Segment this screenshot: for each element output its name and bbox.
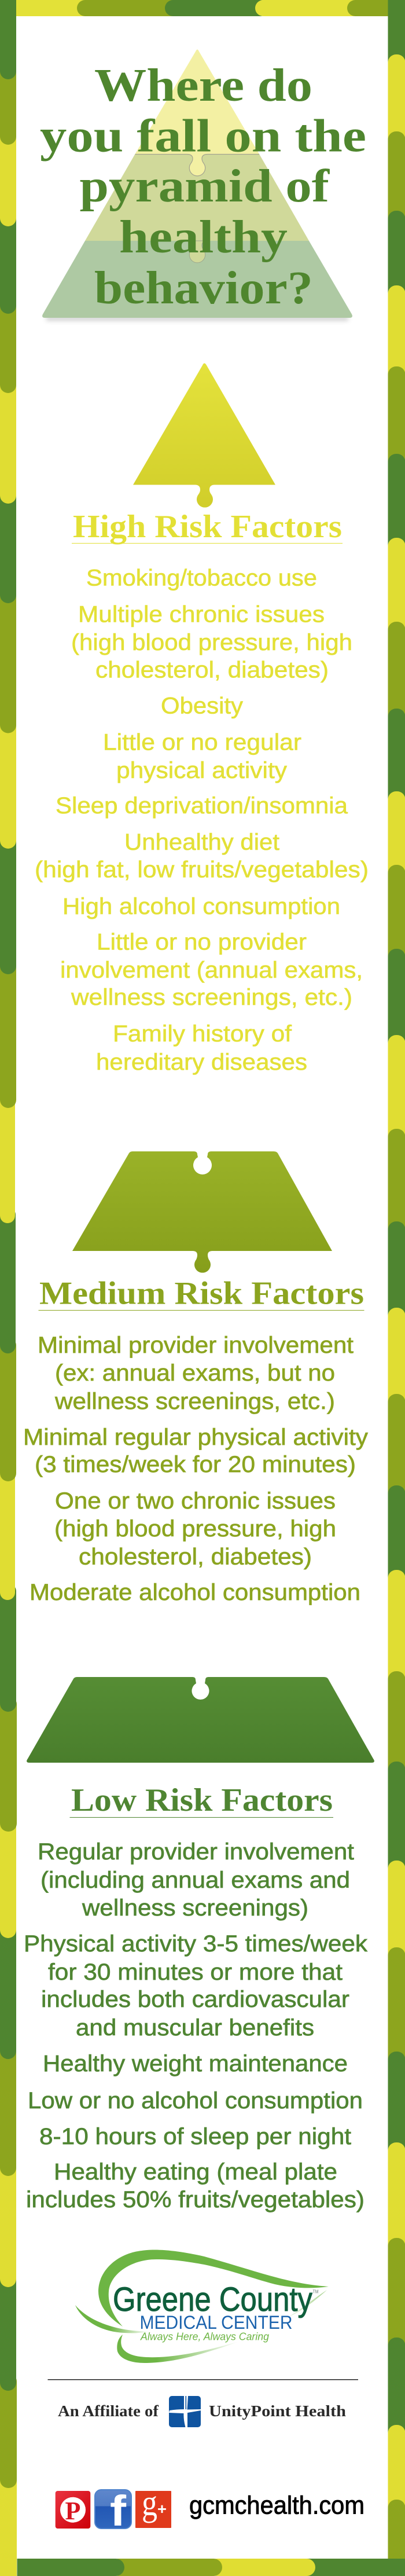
text block: high risk list: Family history of (113, 1021, 292, 1047)
text block: high risk list: cholesterol, diabetes) (95, 658, 329, 683)
text block: medium risk list: (ex: annual exams, but no (55, 1360, 335, 1386)
text block: high risk list: Sleep deprivation/insomnia (56, 793, 348, 819)
pyramid tier: middle (85, 154, 309, 241)
puzzle seam (135, 154, 259, 176)
left border stripe (0, 0, 17, 2576)
heading: high risk factors: High Risk Factors (73, 509, 342, 545)
affiliate line (58, 2396, 346, 2427)
text block: medium risk list: (high blood pressure, high (54, 1516, 336, 1542)
affiliate text: An Affiliate of (58, 2402, 159, 2420)
text block: medium risk list: One or two chronic issues (55, 1488, 336, 1514)
text block: high risk list: physical activity (116, 758, 287, 783)
icon: pinterest (56, 2491, 90, 2529)
text block: low risk list: for 30 minutes or more that (48, 1959, 343, 1985)
text block: medium risk list: (3 times/week for 20 minutes) (35, 1452, 356, 1477)
text block: medium risk list: wellness screenings, etc.) (54, 1389, 335, 1414)
top border stripe (16, 0, 399, 16)
text block: high risk list: hereditary diseases (96, 1050, 307, 1075)
logo swoosh: lower left (75, 2305, 149, 2333)
text block: low risk list: Healthy eating (meal plate (54, 2159, 337, 2185)
text block: high risk list: involvement (annual exams, (60, 957, 363, 983)
logo swoosh: bottom (117, 2335, 238, 2363)
heading: medium risk factors: Medium Risk Factors (39, 1276, 364, 1312)
text block: high risk list: Obesity (161, 693, 243, 719)
text block: low risk list: Physical activity 3-5 times/week (24, 1931, 368, 1957)
logo swoosh: top arc (98, 2250, 329, 2327)
icon: medium risk pyramid tier (72, 1151, 332, 1273)
title: pyramid of (80, 161, 330, 212)
title (40, 60, 366, 314)
text block: low risk list: (including annual exams and (41, 1867, 350, 1893)
text block: high risk list: Smoking/tobacco use (86, 566, 317, 591)
heading: low risk factors: Low Risk Factors (71, 1782, 333, 1818)
logo: Greene County Medical Center (75, 2250, 329, 2363)
affiliate name: UnityPoint Health (209, 2402, 346, 2420)
text block: low risk list (24, 1839, 368, 2212)
text block: high risk list: High alcohol consumption (62, 894, 340, 919)
text block: medium risk list (23, 1333, 368, 1605)
puzzle knob: middle to bottom (187, 241, 208, 263)
pyramid tier: bottom (42, 241, 352, 318)
title: you fall on the (40, 111, 366, 162)
text block: high risk list (35, 566, 369, 1075)
icon: UnityPoint cross (169, 2396, 201, 2427)
text block: low risk list: Low or no alcohol consumption (28, 2088, 363, 2113)
logo swoosh: right thin (288, 2290, 327, 2317)
pyramid graphic (42, 50, 352, 321)
text block: low risk list: Healthy weight maintenance (43, 2051, 348, 2076)
text block: low risk list: 8-10 hours of sleep per night (39, 2124, 351, 2149)
text block: low risk list: Regular provider involvement (38, 1839, 354, 1865)
icon: high risk pyramid tip (133, 364, 275, 508)
text block: high risk list: Little or no regular (103, 729, 301, 755)
icon: google plus: g (142, 2482, 157, 2523)
text block: high risk list: (high fat, low fruits/vegetables) (35, 857, 369, 883)
text block: medium risk list: cholesterol, diabetes) (79, 1544, 312, 1570)
icon: low risk pyramid tier (27, 1677, 374, 1763)
text block: medium risk list: Minimal regular physical activity (23, 1425, 368, 1450)
text block: low risk list: includes 50% fruits/vegetables) (26, 2187, 365, 2212)
icon: facebook (95, 2487, 131, 2535)
icon: facebook: f (110, 2487, 126, 2535)
text block: high risk list: (high blood pressure, high (71, 630, 352, 655)
icon: google plus: + (157, 2500, 167, 2518)
text block: medium risk list: Moderate alcohol consumption (30, 1580, 360, 1605)
logo text: Medical Center: MEDICAL CENTER (140, 2312, 293, 2333)
bottom border stripe (17, 2559, 405, 2576)
text block: high risk list: Multiple chronic issues (78, 602, 325, 628)
website url: gcmchealth.com (189, 2491, 365, 2519)
text block: high risk list: Little or no provider (97, 930, 307, 955)
text block: low risk list: includes both cardiovascular (41, 1987, 349, 2012)
icon: google plus (135, 2482, 171, 2528)
text block: high risk list: Unhealthy diet (124, 830, 279, 855)
text block: high risk list: wellness screenings, etc.) (71, 985, 352, 1010)
icon: pinterest: P (65, 2497, 80, 2525)
title: healthy (119, 212, 288, 263)
text block: low risk list: wellness screenings) (82, 1895, 308, 1921)
text block: low risk list: and muscular benefits (76, 2015, 314, 2041)
title: Where do (94, 60, 312, 111)
text block: medium risk list: Minimal provider involvement (38, 1333, 354, 1358)
logo text: tagline: Always Here, Always Caring (140, 2331, 269, 2342)
logo text: Greene County: Greene County (113, 2281, 312, 2318)
right border stripe (388, 0, 405, 2576)
logo text: trademark: TM (312, 2289, 319, 2295)
pyramid tier: top (135, 50, 259, 176)
title: behavior? (94, 263, 313, 314)
